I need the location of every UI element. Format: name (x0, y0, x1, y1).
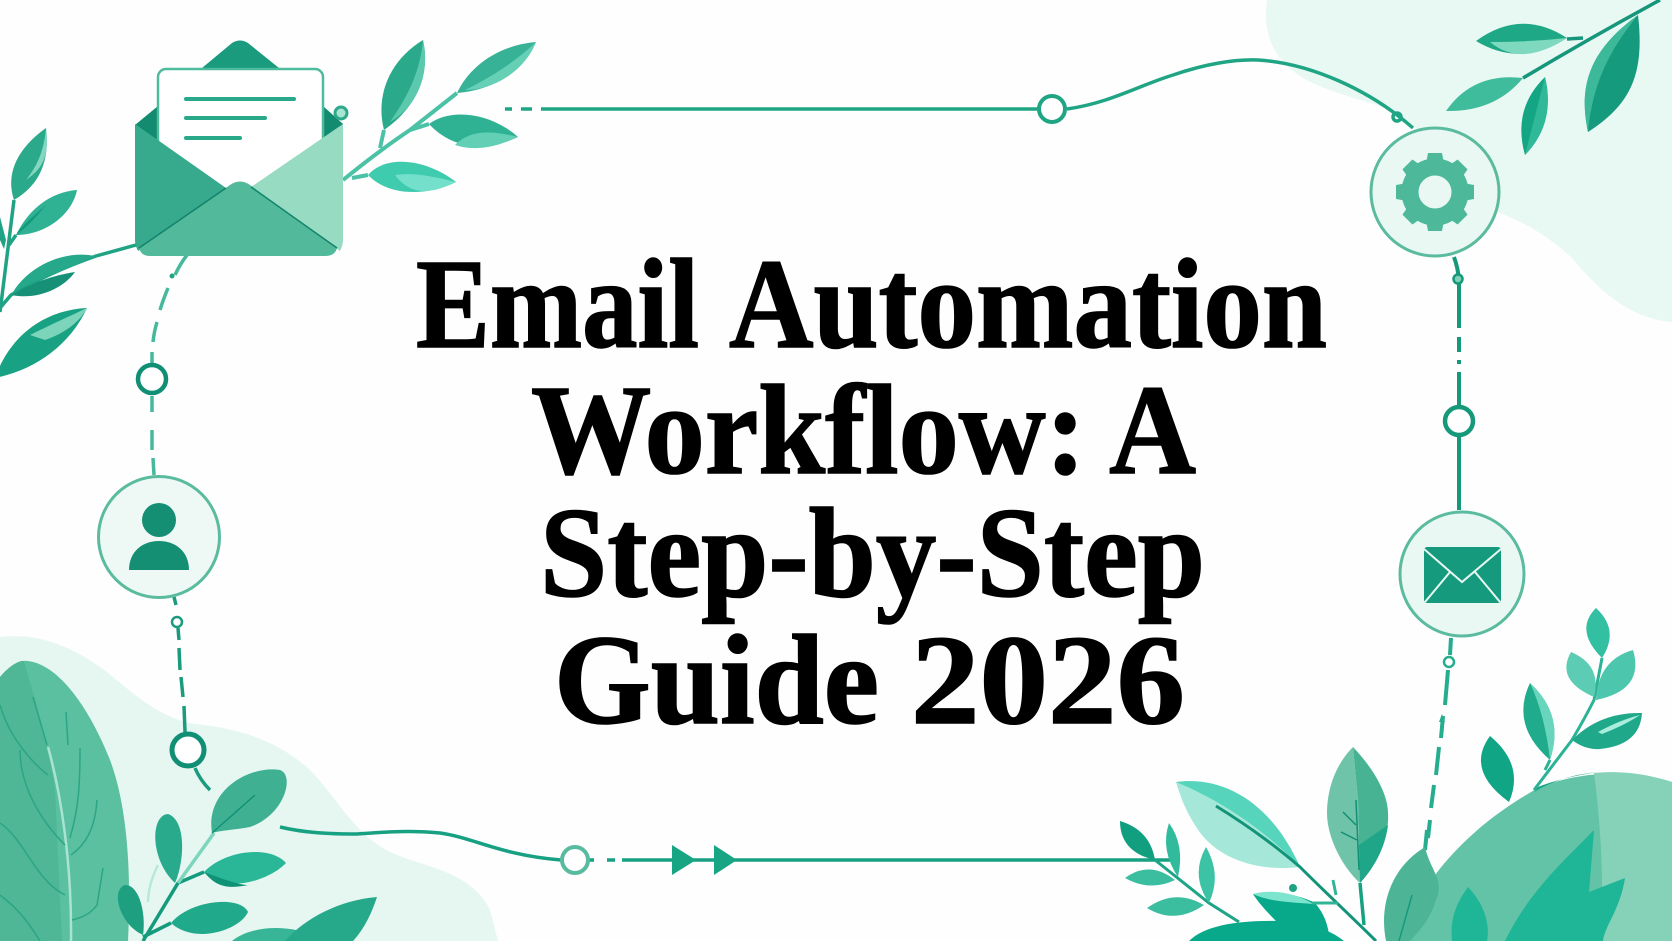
connector: right dashed line (1454, 257, 1462, 510)
node: left upper (138, 365, 166, 393)
connector: left lower dashed line (172, 597, 210, 790)
icon: mail in circle (1400, 512, 1524, 636)
title: Guide (554, 609, 879, 751)
connector: bottom line (280, 827, 1180, 860)
arrow: bottom line second (714, 845, 737, 875)
icon: open envelope with letter (135, 40, 347, 256)
connector: lower right dashed line (1425, 638, 1454, 850)
title: Email (416, 233, 699, 375)
title: 2026 (911, 609, 1185, 751)
icon: person in circle (98, 476, 220, 598)
sprig: right side (1481, 608, 1642, 802)
icon: gear in circle (1371, 128, 1499, 256)
sprig: top right (1446, 0, 1660, 155)
connector: top line (505, 60, 1413, 128)
node: left lower (172, 734, 204, 766)
background blob: bottom left (0, 636, 498, 941)
large mound: bottom right (1400, 772, 1672, 941)
leaf: large pale (1176, 781, 1376, 941)
arrow: bottom line first (672, 845, 696, 875)
node: right line (1445, 407, 1473, 435)
sprig: bottom right small (1120, 821, 1239, 922)
connector: left upper dashed line (152, 255, 187, 475)
title: Automation (729, 233, 1327, 375)
large leaf: bottom left (0, 661, 129, 941)
leaf: bottom right centre (1327, 747, 1388, 925)
sprig: left side (0, 128, 136, 378)
leaf: on mound (1384, 847, 1439, 941)
leaves: bottom right dark cluster (1189, 880, 1344, 941)
node: bottom line (562, 847, 588, 873)
title (416, 233, 1327, 751)
title: Workflow: A (531, 359, 1196, 501)
title: Step-by-Step (540, 482, 1205, 624)
sprig: bottom left (118, 769, 377, 941)
background blob: top right (1266, 0, 1672, 322)
sprig: top left right side (343, 40, 536, 192)
node: top line (1039, 96, 1065, 122)
